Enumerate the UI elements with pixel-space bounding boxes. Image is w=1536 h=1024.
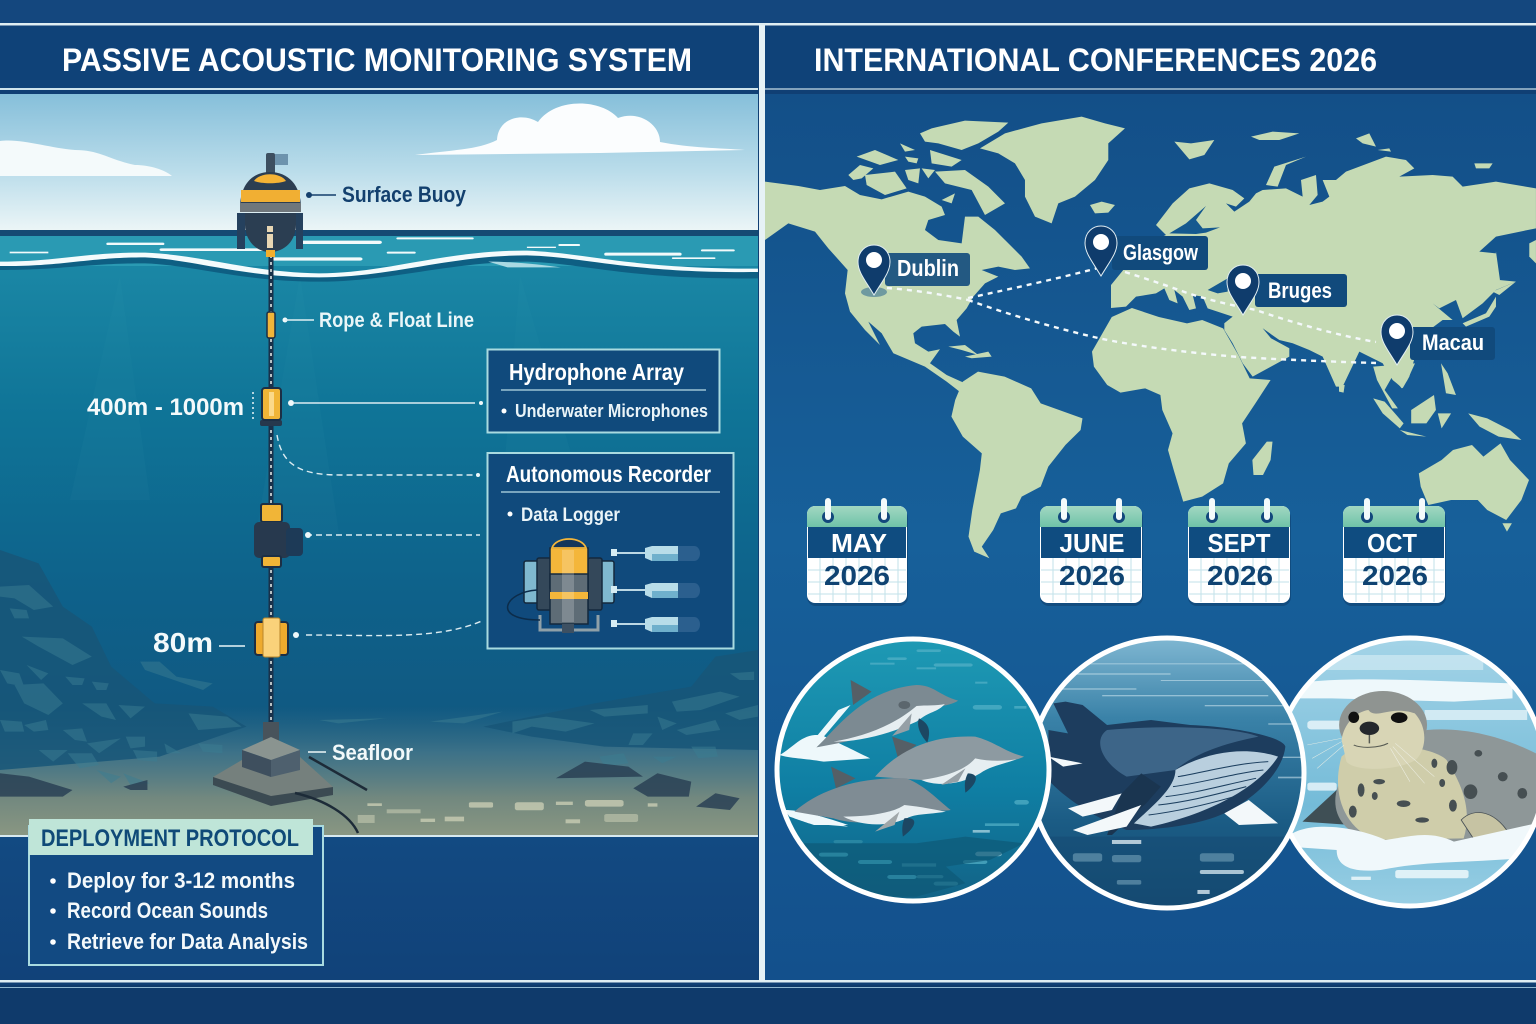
left panel title: PASSIVE ACOUSTIC MONITORING SYSTEM	[62, 42, 692, 78]
icon: lower float 80m	[255, 618, 299, 657]
panel: passive acoustic monitoring system	[0, 26, 758, 980]
panel divider	[759, 25, 765, 981]
depth label: 400m-1000m: 400m - 1000m	[87, 394, 244, 421]
label: surface buoy: Surface Buoy	[342, 182, 467, 207]
wave surface	[0, 237, 758, 282]
callout: hydrophone array: Hydrophone Array	[509, 359, 684, 385]
left header band	[0, 26, 758, 88]
depth label: 80m	[153, 627, 245, 658]
photo: seal on ice	[1289, 636, 1536, 908]
callout: autonomous recorder	[488, 453, 734, 648]
dolphin 1	[851, 680, 872, 705]
location: Macau	[1381, 315, 1495, 365]
world map	[765, 117, 1536, 558]
icon: hydrophone	[260, 388, 294, 426]
panel: deployment protocol	[29, 819, 323, 965]
inland seas	[1169, 206, 1228, 293]
panel: international conferences 2026	[765, 26, 1536, 980]
ocean	[0, 230, 758, 837]
location: Glasgow: Glasgow	[1123, 240, 1199, 265]
calendar: Oct 2026	[1343, 498, 1446, 606]
icon: surface buoy	[237, 153, 303, 257]
protocol list	[50, 868, 308, 954]
protocol list: Retrieve for Data Analysis	[67, 929, 308, 954]
callout: autonomous recorder: Data Logger	[521, 505, 621, 526]
location: Macau: Macau	[1422, 330, 1484, 355]
dolphin 3	[831, 767, 855, 788]
photo: dolphins	[774, 636, 1052, 904]
location: Glasgow	[1085, 226, 1208, 276]
callout: hydrophone array	[488, 350, 720, 432]
calendar: Oct 2026: OCT	[1367, 528, 1417, 558]
calendar: Oct 2026: 2026	[1362, 560, 1428, 591]
protocol list: Record Ocean Sounds	[67, 898, 268, 923]
location: Dublin: Dublin	[897, 255, 959, 281]
dolphin 2	[892, 737, 917, 758]
photo: breaching whale	[1038, 636, 1306, 910]
location: Bruges	[1227, 265, 1347, 315]
calendar: June 2026: 2026	[1059, 560, 1125, 591]
sky	[0, 94, 758, 232]
mooring line	[268, 255, 274, 730]
icon: data logger	[508, 539, 614, 633]
icon: seafloor anchor	[213, 722, 367, 833]
label: seafloor: Seafloor	[332, 740, 413, 765]
connector to hydrophone array	[294, 401, 483, 405]
location: Dublin	[858, 245, 970, 297]
heading tab: deployment protocol	[29, 819, 313, 855]
seafloor	[0, 550, 758, 837]
calendar: May 2026	[807, 498, 908, 606]
calendar: June 2026: JUNE	[1060, 528, 1124, 558]
calendar: Sept 2026	[1188, 498, 1291, 606]
icon: recorder on line	[254, 504, 311, 567]
calendar: Sept 2026: SEPT	[1208, 528, 1271, 558]
calendar: May 2026: MAY	[831, 528, 887, 558]
protocol list: Deploy for 3-12 months	[67, 868, 295, 893]
depth label: 80m: 80m	[153, 627, 213, 658]
callout: hydrophone array: Underwater Microphones	[515, 401, 708, 421]
calendar: May 2026: 2026	[824, 560, 890, 591]
lower band	[0, 835, 758, 980]
icon: rope float	[267, 312, 275, 338]
right panel title: INTERNATIONAL CONFERENCES 2026	[814, 42, 1377, 78]
location: Bruges: Bruges	[1268, 278, 1332, 303]
conference route lines	[887, 268, 1376, 363]
right header band	[765, 26, 1536, 88]
connector to autonomous recorder	[277, 435, 484, 636]
heading tab: deployment protocol: DEPLOYMENT PROTOCOL	[41, 825, 299, 852]
label: rope and float line: Rope & Float Line	[319, 309, 474, 332]
icon: hydrophone sensors	[611, 546, 700, 632]
callout: autonomous recorder: Autonomous Recorder	[506, 461, 711, 487]
calendar: Sept 2026: 2026	[1207, 560, 1273, 591]
calendar: June 2026	[1040, 498, 1143, 606]
